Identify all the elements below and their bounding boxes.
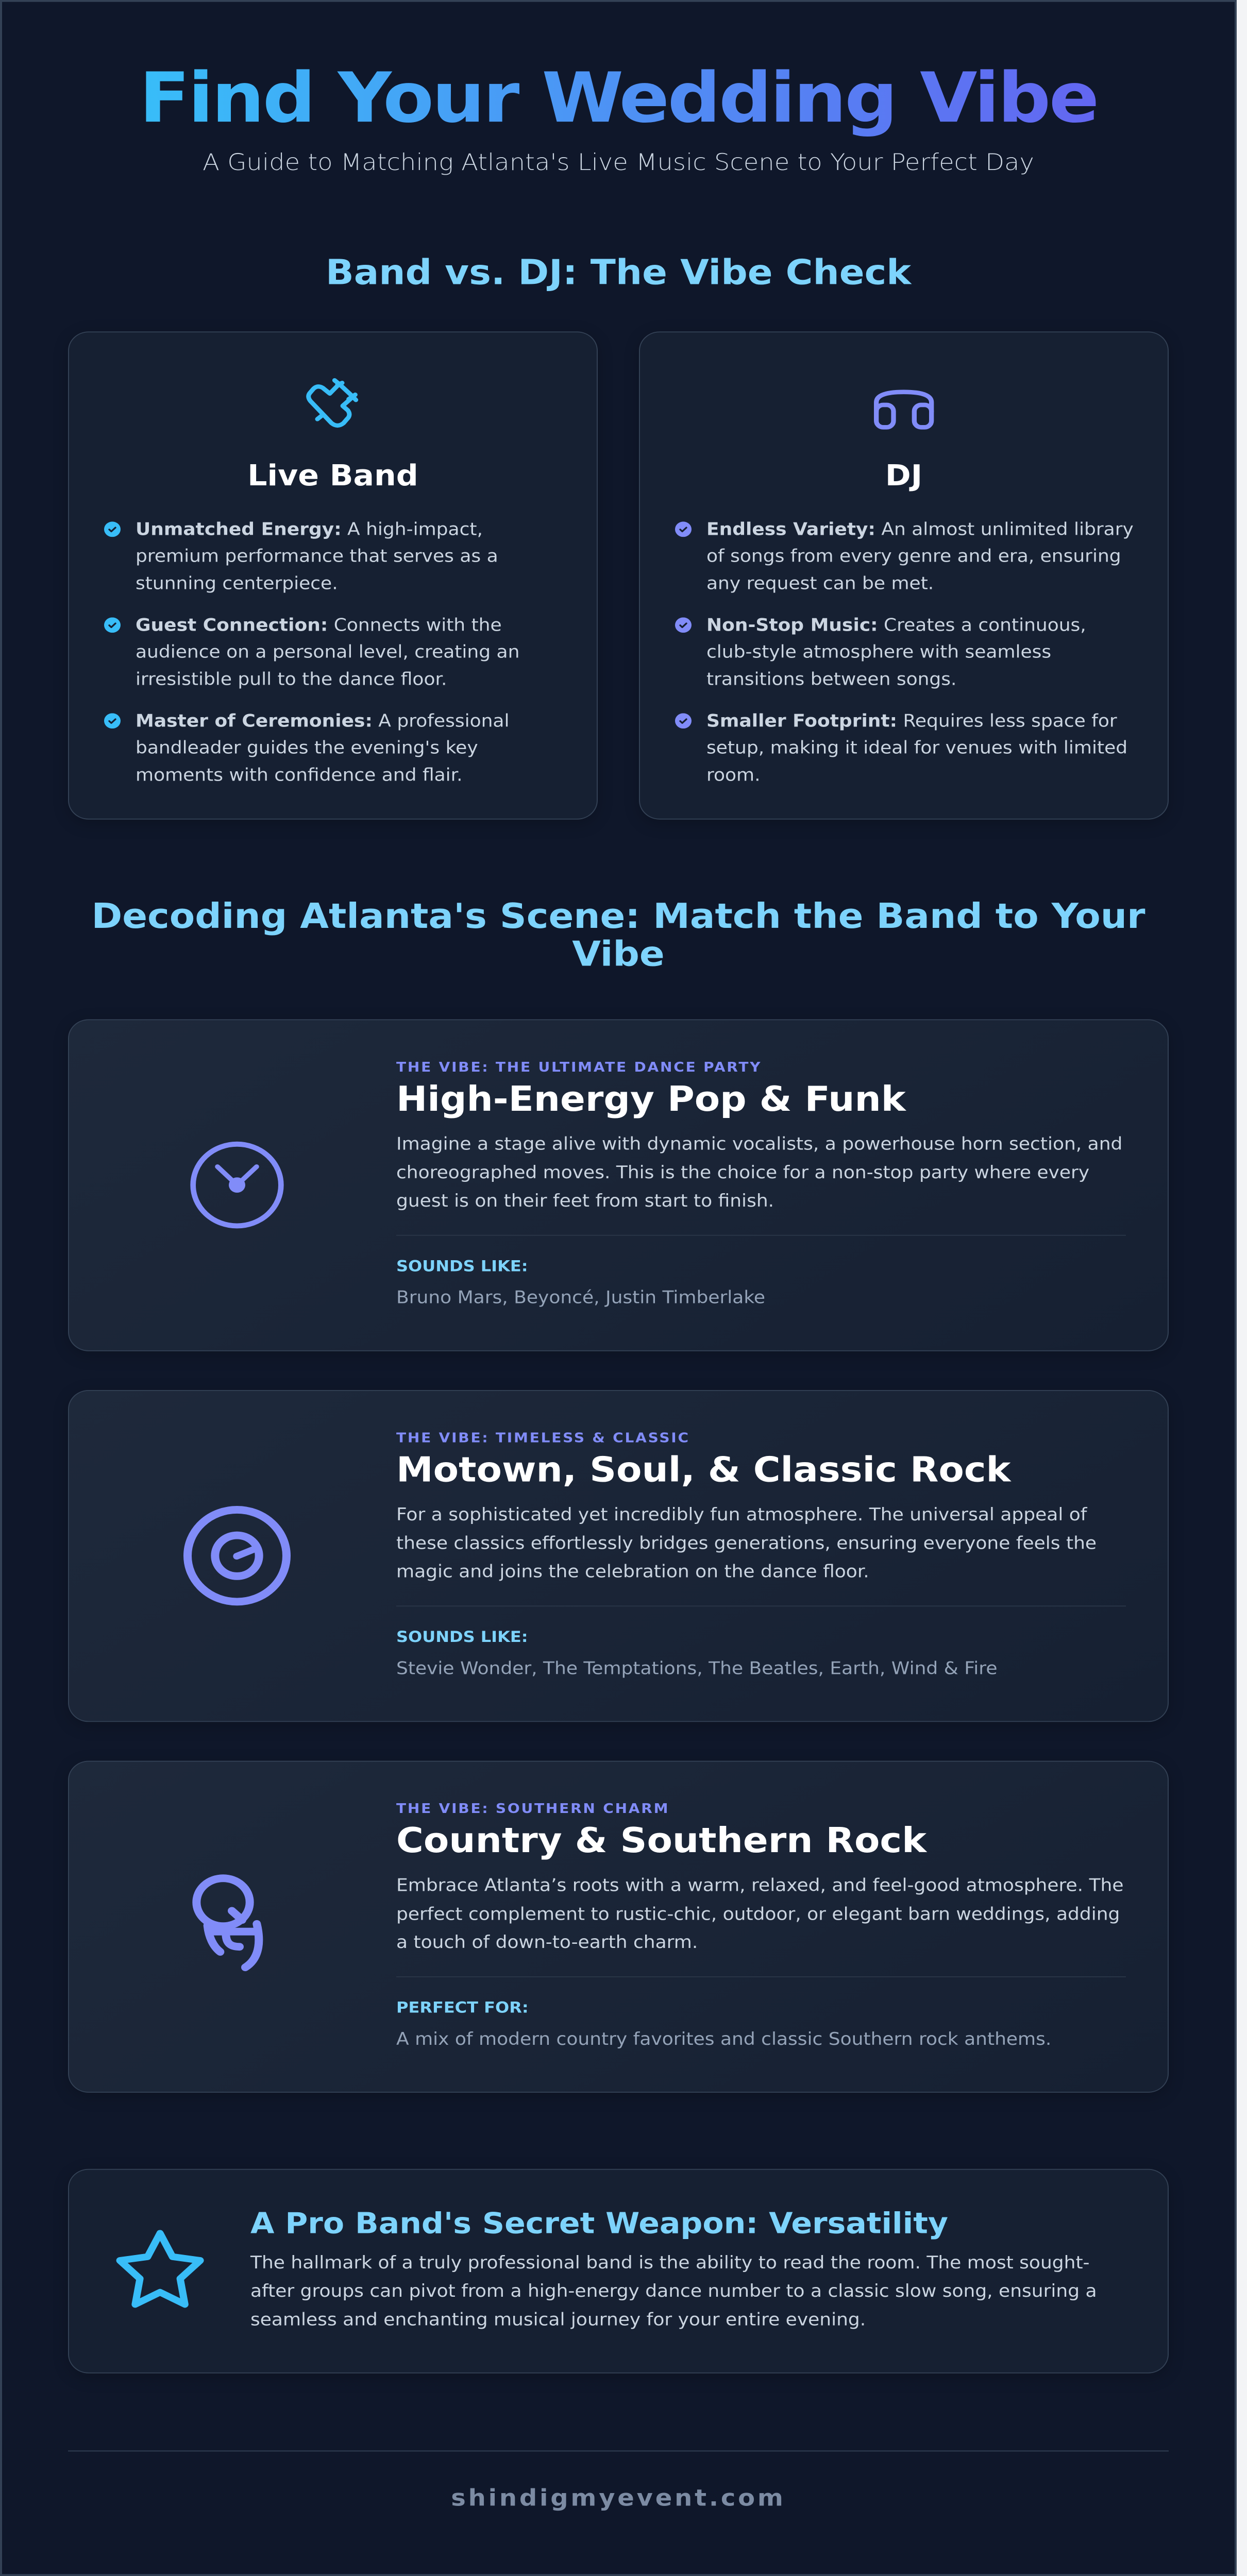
checklist: live band [104,520,519,785]
title: Find Your Wedding Vibe [139,58,1098,138]
text [706,616,1086,689]
music mix: A mix of modern country favorites and classic Southern rock anthems. [396,2029,1051,2049]
icon: check [675,617,692,633]
callout: versatility [68,2169,1169,2374]
genre name: Motown, Soul, & Classic Rock [396,1449,1010,1489]
callout body: seamless and enchanting musical journey for your entire evening. [250,2310,866,2330]
description: Embrace Atlanta’s roots with a warm, relaxed, and feel-good atmosphere. The [396,1876,1124,1895]
genre name: Country & Southern Rock [396,1820,926,1860]
perfect-for label: PERFECT FOR: [396,1998,529,2016]
text: setup, making it ideal for venues with limited [706,738,1127,758]
description: choreographed moves. This is the choice for a non-stop party where every [396,1163,1089,1182]
description [396,1872,1124,1957]
footer: website: shindigmyevent.com [451,2484,786,2511]
text [136,711,509,785]
icon: check [104,713,121,728]
text: Unmatched Energy: A high-impact, [136,520,483,539]
icon: clock [155,1121,319,1255]
description: magic and joins the celebration on the dance floor. [396,1562,869,1582]
heading: live band: Live Band [247,459,418,493]
item: endless variety [675,520,1134,594]
icon: headphones [874,389,934,430]
text: Endless Variety: An almost unlimited library [706,520,1134,539]
artists: Bruno Mars, Beyoncé, Justin Timberlake [396,1288,765,1308]
icon: check [104,617,121,633]
panel: dj [639,331,1169,820]
heading: band vs dj: Band vs. DJ: The Vibe Check [326,252,911,292]
vibe label: THE VIBE: SOUTHERN CHARM [396,1801,669,1817]
description: perfect complement to rustic-chic, outdoor, or elegant barn weddings, adding [396,1904,1120,1924]
text [706,711,1127,785]
heading: dj: DJ [885,459,922,493]
panel: live band [68,331,598,820]
description [396,1501,1097,1586]
text: stunning centerpiece. [136,573,338,594]
heading: decoding atlanta's scene [2,897,1235,973]
icon: record dial [155,1489,319,1624]
sounds-like label: SOUNDS LIKE: [396,1257,528,1275]
checklist: dj [675,520,1134,785]
item: guest connection [104,616,519,689]
artists: Stevie Wonder, The Temptations, The Beatles, Earth, Wind & Fire [396,1658,997,1678]
item: smaller footprint [675,711,1127,785]
heading: decoding atlanta's scene: Vibe [572,934,665,974]
description: guest is on their feet from start to finish. [396,1191,774,1211]
callout body [250,2249,1097,2334]
vibe label: THE VIBE: TIMELESS & CLASSIC [396,1430,690,1446]
text: Master of Ceremonies: A professional [136,711,509,731]
text: audience on a personal level, creating an [136,642,519,662]
description: a touch of down-to-earth charm. [396,1933,698,1953]
icon: check [675,521,692,537]
description: For a sophisticated yet incredibly fun atmosphere. The universal appeal of [396,1505,1087,1525]
text: Smaller Footprint: Requires less space for [706,711,1117,731]
icon: star [112,2226,208,2315]
heading: decoding atlanta's scene: Decoding Atlanta's Scene: Match the Band to Your [91,895,1145,936]
text [136,520,498,594]
text: transitions between songs. [706,669,956,689]
text [136,616,519,689]
sounds-like label: SOUNDS LIKE: [396,1628,528,1646]
text: moments with confidence and flair. [136,765,463,785]
text [706,520,1134,594]
item: master of ceremonies [104,711,509,785]
vibe label: THE VIBE: THE ULTIMATE DANCE PARTY [396,1059,762,1075]
item: unmatched energy [104,520,498,594]
subtitle: A Guide to Matching Atlanta's Live Music Scene to Your Perfect Day [203,149,1034,176]
panel: motown soul classic rock [68,1390,1169,1722]
callout body: The hallmark of a truly professional band is the ability to read the room. The most sought- [250,2253,1090,2273]
callout title: A Pro Band's Secret Weapon: Versatility [250,2207,948,2240]
icon: check [675,713,692,728]
icon: guitar [306,378,359,428]
icon: check [104,521,121,537]
text: Non-Stop Music: Creates a continuous, [706,616,1086,635]
panel: country and southern rock [68,1761,1169,2093]
description: Imagine a stage alive with dynamic vocalists, a powerhouse horn section, and [396,1134,1122,1154]
text: Guest Connection: Connects with the [136,616,502,635]
text: premium performance that serves as a [136,547,498,566]
panel: high-energy pop and funk [68,1019,1169,1351]
item: non-stop music [675,616,1086,689]
callout body: after groups can pivot from a high-energy dance number to a classic slow song, ensuring a [250,2281,1097,2301]
icon: abstract guitar [155,1858,319,1993]
text: of songs from every genre and era, ensuring [706,547,1121,566]
text: club-style atmosphere with seamless [706,642,1051,662]
text: any request can be met. [706,573,934,594]
description: these classics effortlessly bridges generations, ensuring everyone feels the [396,1534,1097,1553]
genre name: High-Energy Pop & Funk [396,1079,906,1119]
description [396,1130,1122,1215]
text: room. [706,765,761,785]
text: bandleader guides the evening's key [136,738,478,758]
text: irresistible pull to the dance floor. [136,669,447,689]
